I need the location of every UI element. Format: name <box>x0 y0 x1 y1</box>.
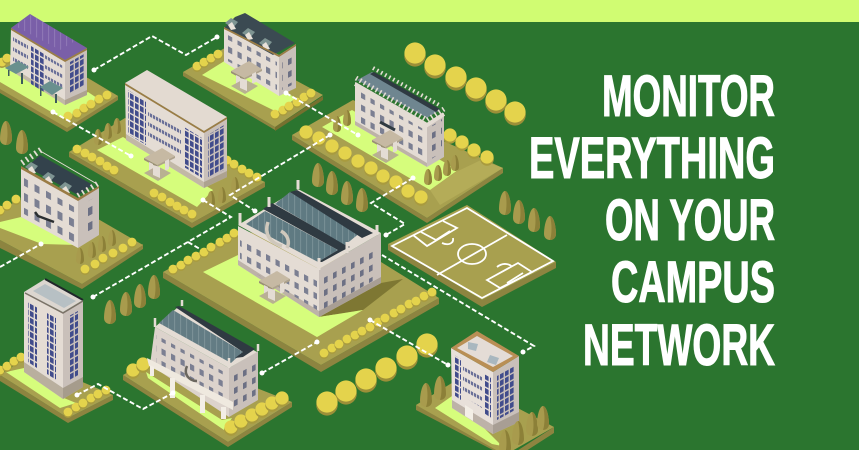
tree row: top right <box>404 42 526 126</box>
cone trees <box>0 121 556 324</box>
soccer field <box>388 205 556 307</box>
building: purple roof block <box>0 14 118 132</box>
roof <box>238 180 381 270</box>
dormers <box>25 162 72 194</box>
building: left tower <box>0 279 113 423</box>
title: CAMPUS <box>611 250 775 315</box>
network connection lines <box>0 36 534 409</box>
building: left-middle mansion <box>0 149 143 289</box>
building: top-middle mansion <box>183 13 323 131</box>
building: tall white block <box>69 70 265 228</box>
building: central main hall <box>163 180 439 372</box>
top band <box>0 0 859 22</box>
tree row: lower <box>316 333 438 416</box>
building: bottom-right tower <box>416 331 554 450</box>
building: right-upper mansion <box>292 68 503 223</box>
canopies <box>5 61 63 103</box>
network node dots <box>38 34 526 398</box>
building: bottom-middle hall <box>123 300 292 447</box>
dormers <box>225 18 272 50</box>
title <box>529 64 775 378</box>
